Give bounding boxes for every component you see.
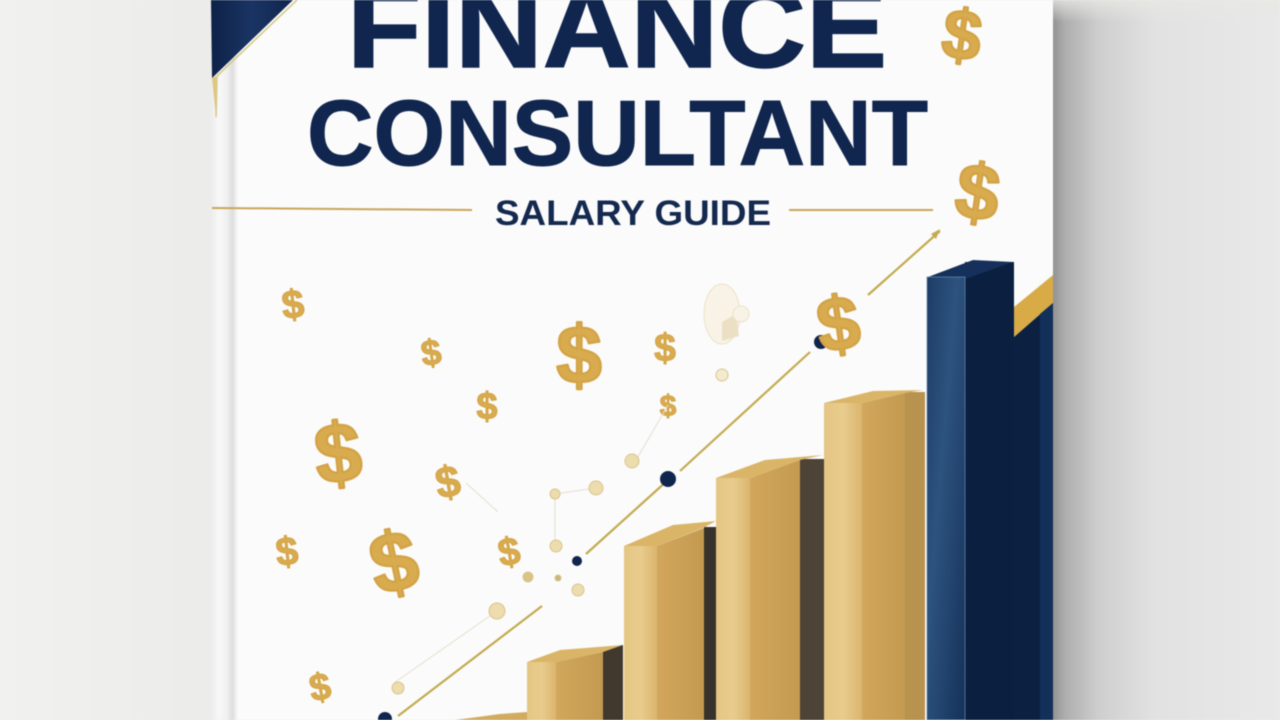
dollar signs: $: [418, 331, 444, 374]
dollar signs: $: [950, 145, 1005, 239]
dollar signs: $: [556, 310, 602, 401]
dollar signs: $: [811, 279, 865, 370]
corner accent bottom right: [1014, 275, 1053, 720]
low bar stub: [455, 712, 527, 720]
dollar signs: $: [495, 529, 524, 576]
faint emblem: [704, 284, 749, 344]
dollar signs: [274, 0, 1005, 711]
dollar signs: $: [361, 511, 426, 613]
dollar signs: $: [432, 456, 464, 509]
dollar signs: $: [274, 529, 300, 575]
bar 4: [824, 390, 925, 720]
bar 2: [624, 521, 716, 720]
small coin network: [392, 369, 728, 694]
title: [307, 0, 928, 185]
book cover: [211, 0, 1053, 720]
title: CONSULTANT: [307, 81, 928, 185]
dollar signs: $: [654, 327, 676, 370]
dollar signs: $: [660, 390, 677, 423]
bar 3: [716, 455, 824, 720]
bar 1: [527, 645, 623, 720]
dollar signs: $: [476, 386, 498, 428]
dollar signs: $: [306, 665, 334, 711]
dollar signs: $: [280, 282, 306, 328]
trend markers: [378, 335, 828, 720]
bar chart: [455, 260, 1014, 720]
bar 5 navy: [927, 260, 1014, 720]
corner ribbon: [211, 0, 297, 117]
book shadow: [1053, 0, 1280, 720]
subtitle: SALARY GUIDE: [495, 194, 771, 233]
dollar signs: $: [310, 404, 366, 502]
growth trend line: [398, 229, 940, 716]
